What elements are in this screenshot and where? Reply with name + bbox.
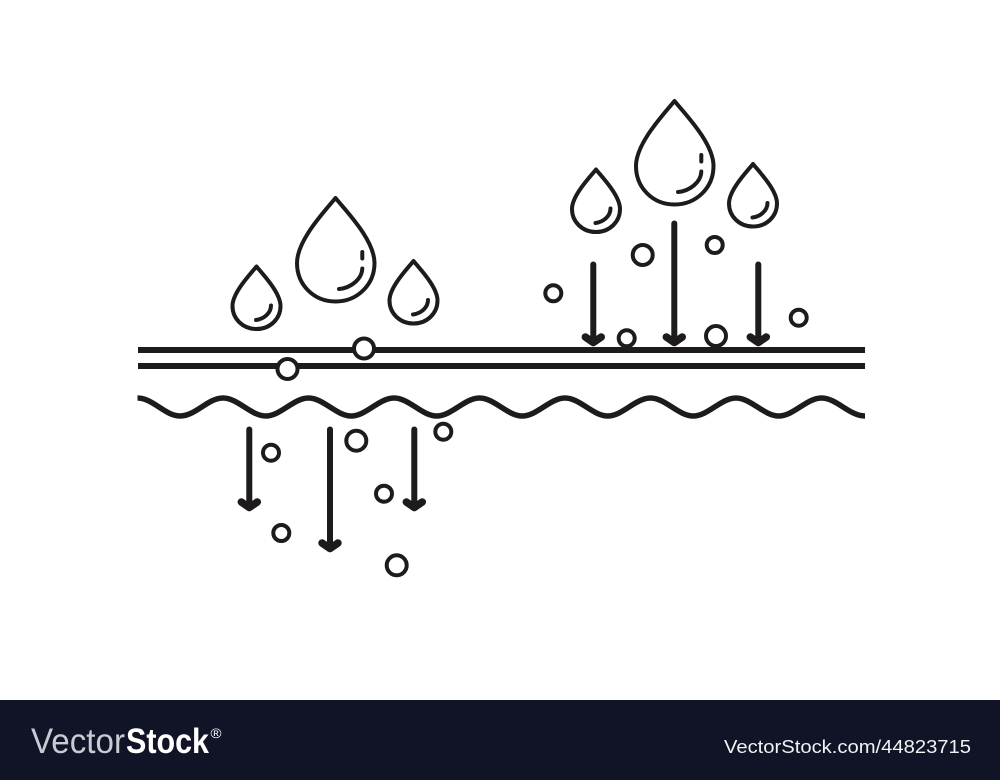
icon: large water drop left <box>297 198 374 302</box>
icon: small water drop left <box>232 266 280 329</box>
brand logo text: ® <box>210 725 222 741</box>
arrow: right <box>750 264 766 342</box>
particles above the skin <box>545 237 807 326</box>
particles passing through skin layers <box>278 338 374 379</box>
brand logo text: Vector <box>31 722 125 761</box>
arrow: right <box>406 430 422 508</box>
arrow: left <box>241 430 257 508</box>
skin layer lines <box>138 350 865 366</box>
panel: skin absorption illustration <box>138 101 865 575</box>
brand logo text <box>31 722 222 761</box>
particles on the skin surface (right) <box>619 326 726 346</box>
image id text: VectorStock.com/44823715 <box>724 737 971 757</box>
left group of water drops <box>232 198 438 329</box>
brand logo text: Stock <box>126 722 209 761</box>
arrows pointing down beneath the skin <box>241 430 422 548</box>
icon: small water drop right <box>390 261 438 324</box>
arrow: centre <box>666 224 682 342</box>
arrow: left <box>585 264 601 342</box>
wavy lower skin layer <box>138 398 865 416</box>
icon: small water drop left <box>572 170 620 232</box>
icon: small water drop right <box>729 164 777 226</box>
particles beneath the skin <box>263 424 451 575</box>
right group of water drops <box>572 101 777 232</box>
arrows pointing down onto the skin <box>585 224 766 342</box>
arrow: centre <box>322 430 338 548</box>
icon: large water drop right <box>636 101 714 204</box>
footer bar <box>0 700 1000 780</box>
